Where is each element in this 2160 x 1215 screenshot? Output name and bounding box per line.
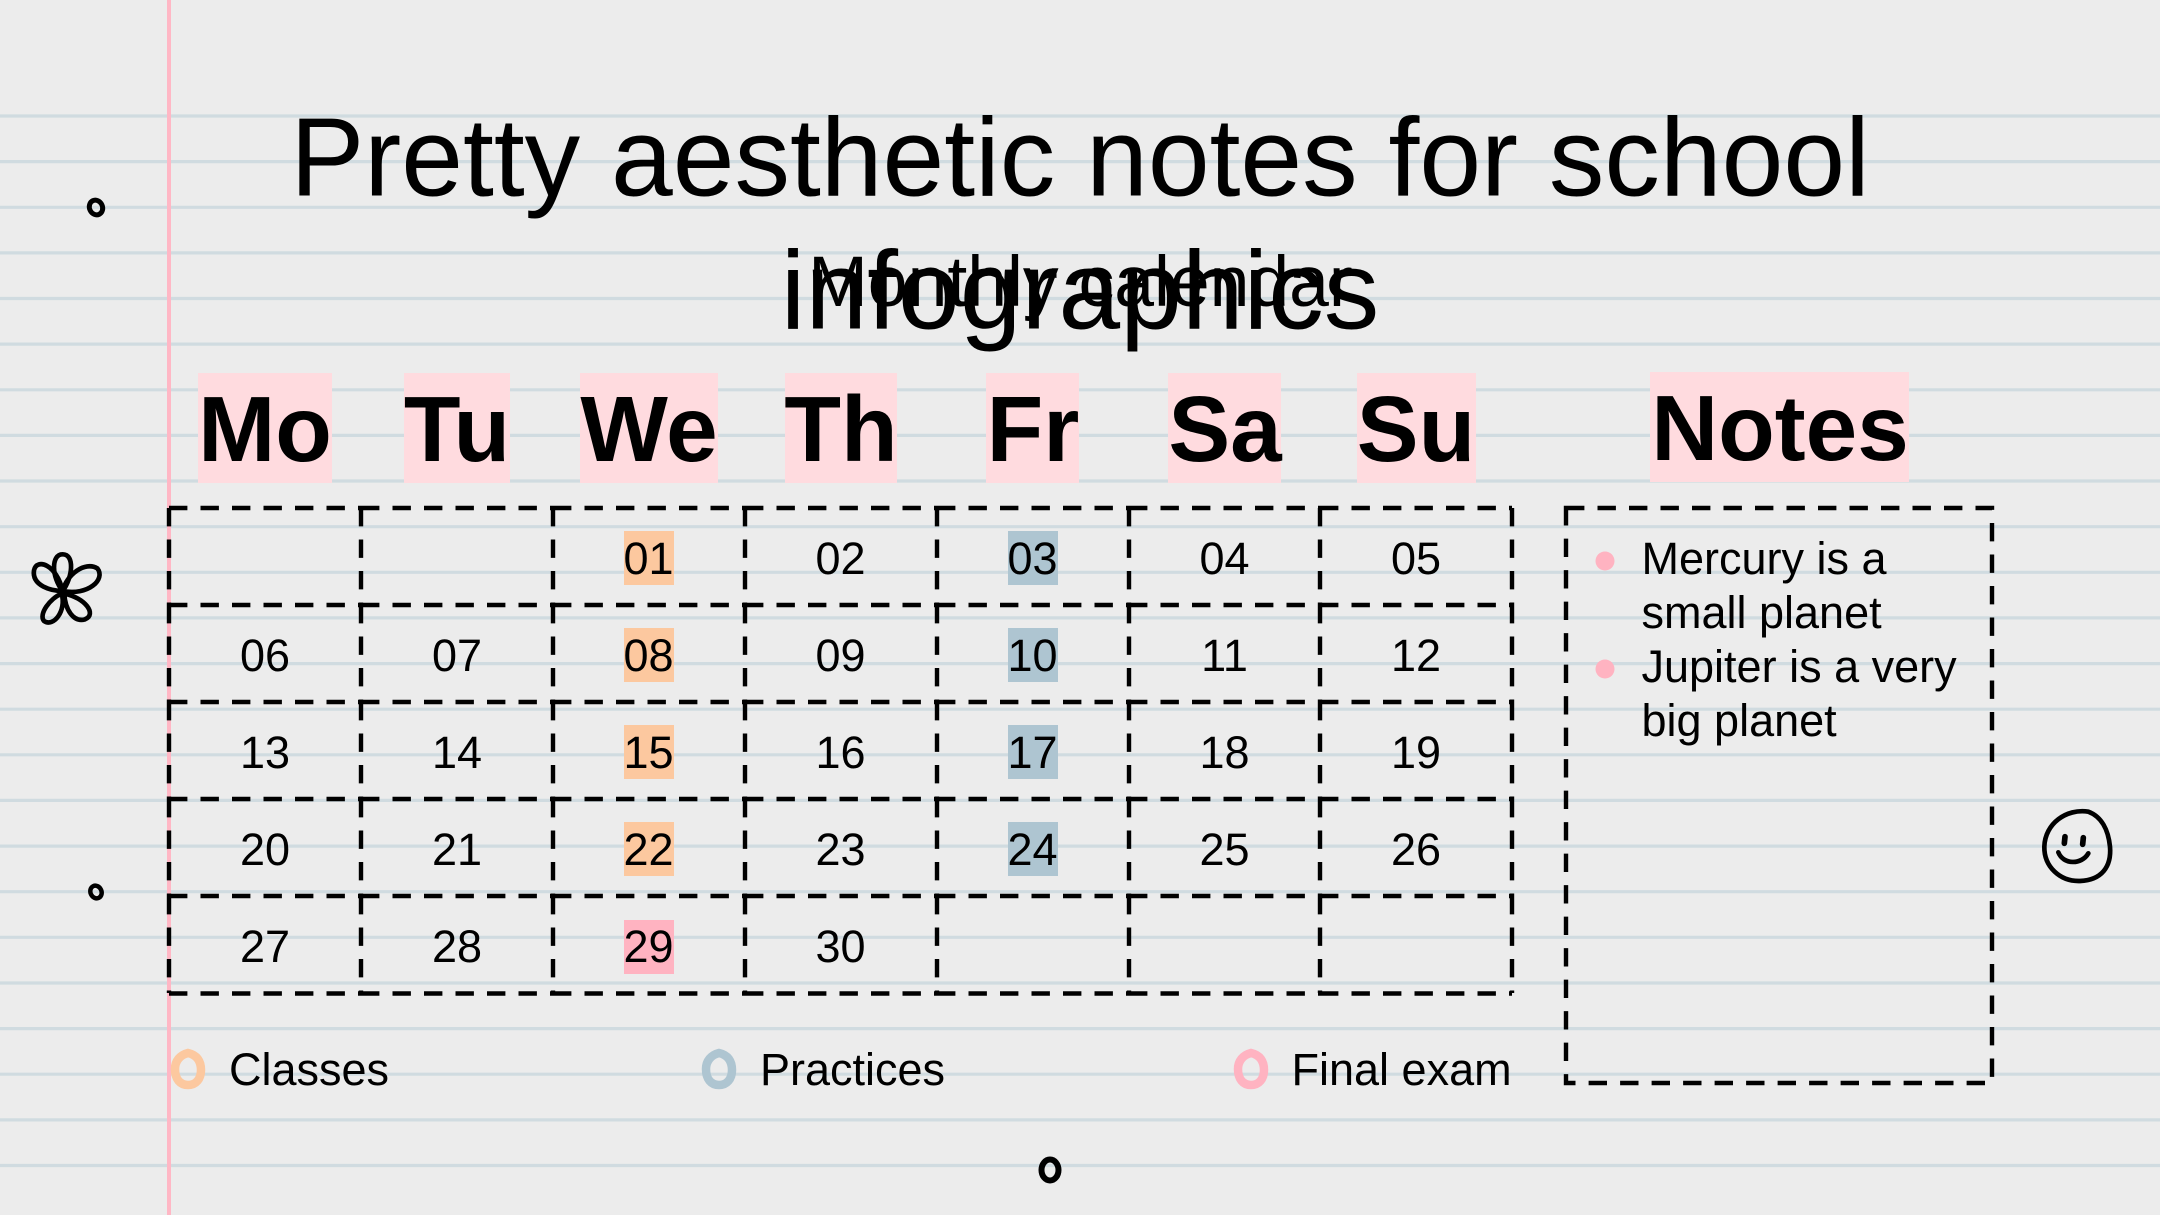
note: Mercury: Mercury is a [1642,533,1888,584]
calendar dates: 30 [815,921,866,972]
bullet [1596,660,1614,678]
date highlights: practices [1008,531,1058,876]
header: Mo: Mo [198,377,332,481]
calendar dates: 21 [432,824,482,875]
calendar dates: 22 [623,824,674,875]
calendar dates: 25 [1199,824,1250,875]
note: Jupiter: big planet [1642,695,1837,746]
date highlight: final exam [624,920,674,974]
calendar dates: 27 [240,921,290,972]
calendar dates: 15 [623,727,674,778]
subtitle: Monthly calendar: Monthly calendar [808,242,1353,322]
date highlights: classes [624,531,674,876]
calendar grid [169,508,1512,994]
header: Tu: Tu [404,377,510,481]
calendar dates: 06 [240,630,290,681]
calendar dates: 02 [815,533,866,584]
icon: small circle middle [88,884,104,900]
calendar dates: 09 [815,630,866,681]
calendar dates: 23 [815,824,866,875]
legend: practices: Practices [760,1044,945,1095]
legend: classes: Classes [229,1044,389,1095]
icon: small circle top [87,198,105,217]
header: Fr: Fr [987,377,1079,481]
legend [175,1044,1512,1095]
calendar dates: 10 [1007,630,1058,681]
calendar dates: 17 [1007,727,1058,778]
note: Jupiter: Jupiter is a very [1642,641,1957,692]
calendar dates: 08 [623,630,674,681]
calendar dates: 29 [623,921,674,972]
header: Su: Su [1357,377,1475,481]
calendar dates: 05 [1391,533,1441,584]
calendar dates: 01 [623,533,674,584]
note: Mercury: small planet [1642,587,1882,638]
calendar dates: 19 [1391,727,1441,778]
legend: final exam: Final exam [1292,1044,1512,1095]
bullet [1596,552,1614,570]
calendar dates: 13 [240,727,290,778]
calendar dates: 11 [1201,630,1248,681]
heading: Notes: Notes [1651,376,1909,480]
weekday headers [198,373,1476,483]
calendar dates: 12 [1391,630,1441,681]
calendar dates: 16 [815,727,866,778]
calendar dates: 14 [432,727,482,778]
calendar dates [240,533,1441,972]
panel: notes [1566,508,1992,1083]
calendar dates: 24 [1007,824,1058,875]
icon: small circle bottom [1042,1160,1058,1180]
title: infographics [781,228,1379,352]
note: Jupiter [1642,641,1957,746]
calendar dates: 04 [1199,533,1250,584]
calendar dates: 07 [432,630,482,681]
note: Mercury [1642,533,1888,638]
calendar dates: 18 [1199,727,1250,778]
header: Sa: Sa [1168,377,1283,481]
header: We: We [580,377,718,481]
calendar dates: 03 [1007,533,1058,584]
icon: flower [34,554,100,622]
calendar dates: 28 [432,921,482,972]
title [290,96,1870,352]
title: Pretty aesthetic notes for school [290,96,1870,220]
calendar dates: 26 [1391,824,1441,875]
calendar dates: 20 [240,824,290,875]
icon: smiley [2044,811,2110,881]
header: Th: Th [784,377,898,481]
